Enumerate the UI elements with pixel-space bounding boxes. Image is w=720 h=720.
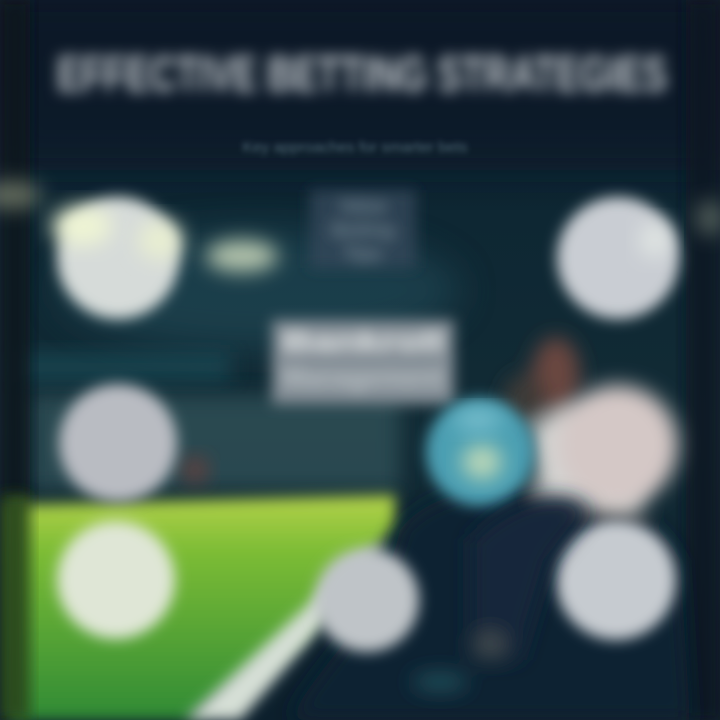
icon: football globe (426, 398, 534, 506)
circle: middle right (558, 385, 678, 505)
player silhouette (290, 337, 690, 720)
circle: bottom right (556, 520, 676, 640)
panel: top centre text block: Tips (345, 244, 381, 264)
circle: bottom centre (315, 548, 419, 652)
panel: top centre text block: Betting (332, 220, 394, 240)
pitch line (185, 535, 390, 720)
football pitch (0, 456, 395, 720)
circle: bottom left (57, 521, 175, 639)
player arm and glove (412, 498, 590, 691)
subtitle: Key approaches for smarter bets (242, 139, 468, 156)
circle: middle left (59, 384, 177, 502)
panel: top centre text block: Value (339, 196, 387, 216)
panel: central callout: Management (283, 364, 444, 392)
panel: central callout (272, 320, 454, 404)
stadium lights (0, 181, 720, 272)
circle: top right (557, 197, 679, 319)
panel: central callout: Bankroll (283, 328, 443, 356)
panel: top centre text block (310, 190, 416, 268)
circle: top left (52, 197, 182, 319)
